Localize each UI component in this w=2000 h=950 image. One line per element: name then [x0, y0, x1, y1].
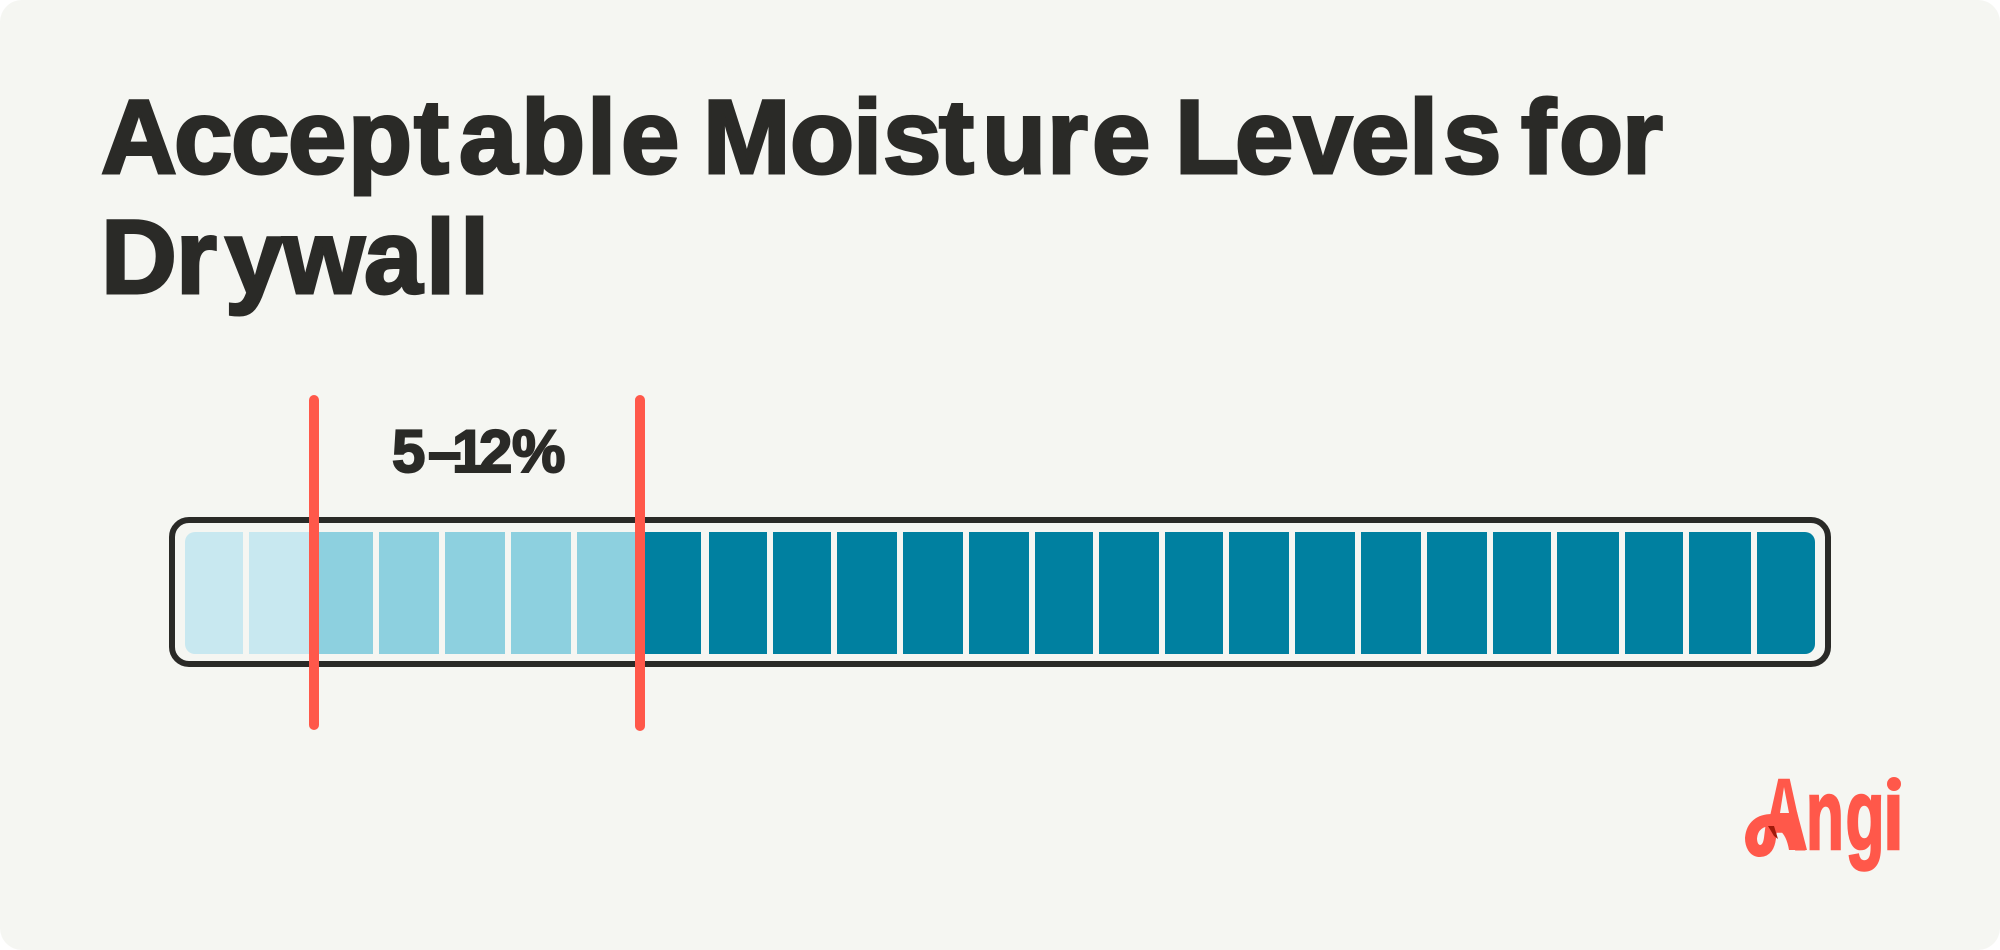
logo wordmark: i	[1883, 758, 1904, 870]
acceptable moisture segments	[309, 532, 637, 654]
lower range marker	[309, 395, 319, 730]
range label: 5–12%: 5–12%	[392, 418, 565, 485]
upper range marker	[635, 395, 645, 731]
logo wordmark: g	[1846, 758, 1885, 870]
logo wordmark: n	[1806, 759, 1844, 871]
logo A solid lower body	[1772, 812, 1807, 850]
Angi logo	[1751, 758, 1905, 871]
logo i-dot cover	[1883, 772, 1905, 792]
logo wordmark	[1762, 758, 1904, 871]
low moisture segments	[185, 532, 309, 654]
logo background cut-out	[1755, 826, 1788, 852]
logo A counter	[1780, 787, 1789, 813]
logo i-dot	[1887, 777, 1901, 791]
logo swoosh	[1751, 820, 1785, 851]
moisture gauge bar	[172, 520, 1828, 664]
title	[101, 79, 1663, 316]
gauge outline	[172, 520, 1828, 664]
logo wordmark: A	[1762, 758, 1806, 871]
logo swoosh shadow	[1768, 826, 1778, 839]
title: Acceptable Moisture Levels for	[101, 79, 1663, 196]
high moisture segments	[637, 532, 1815, 654]
title: Drywall	[101, 199, 489, 316]
